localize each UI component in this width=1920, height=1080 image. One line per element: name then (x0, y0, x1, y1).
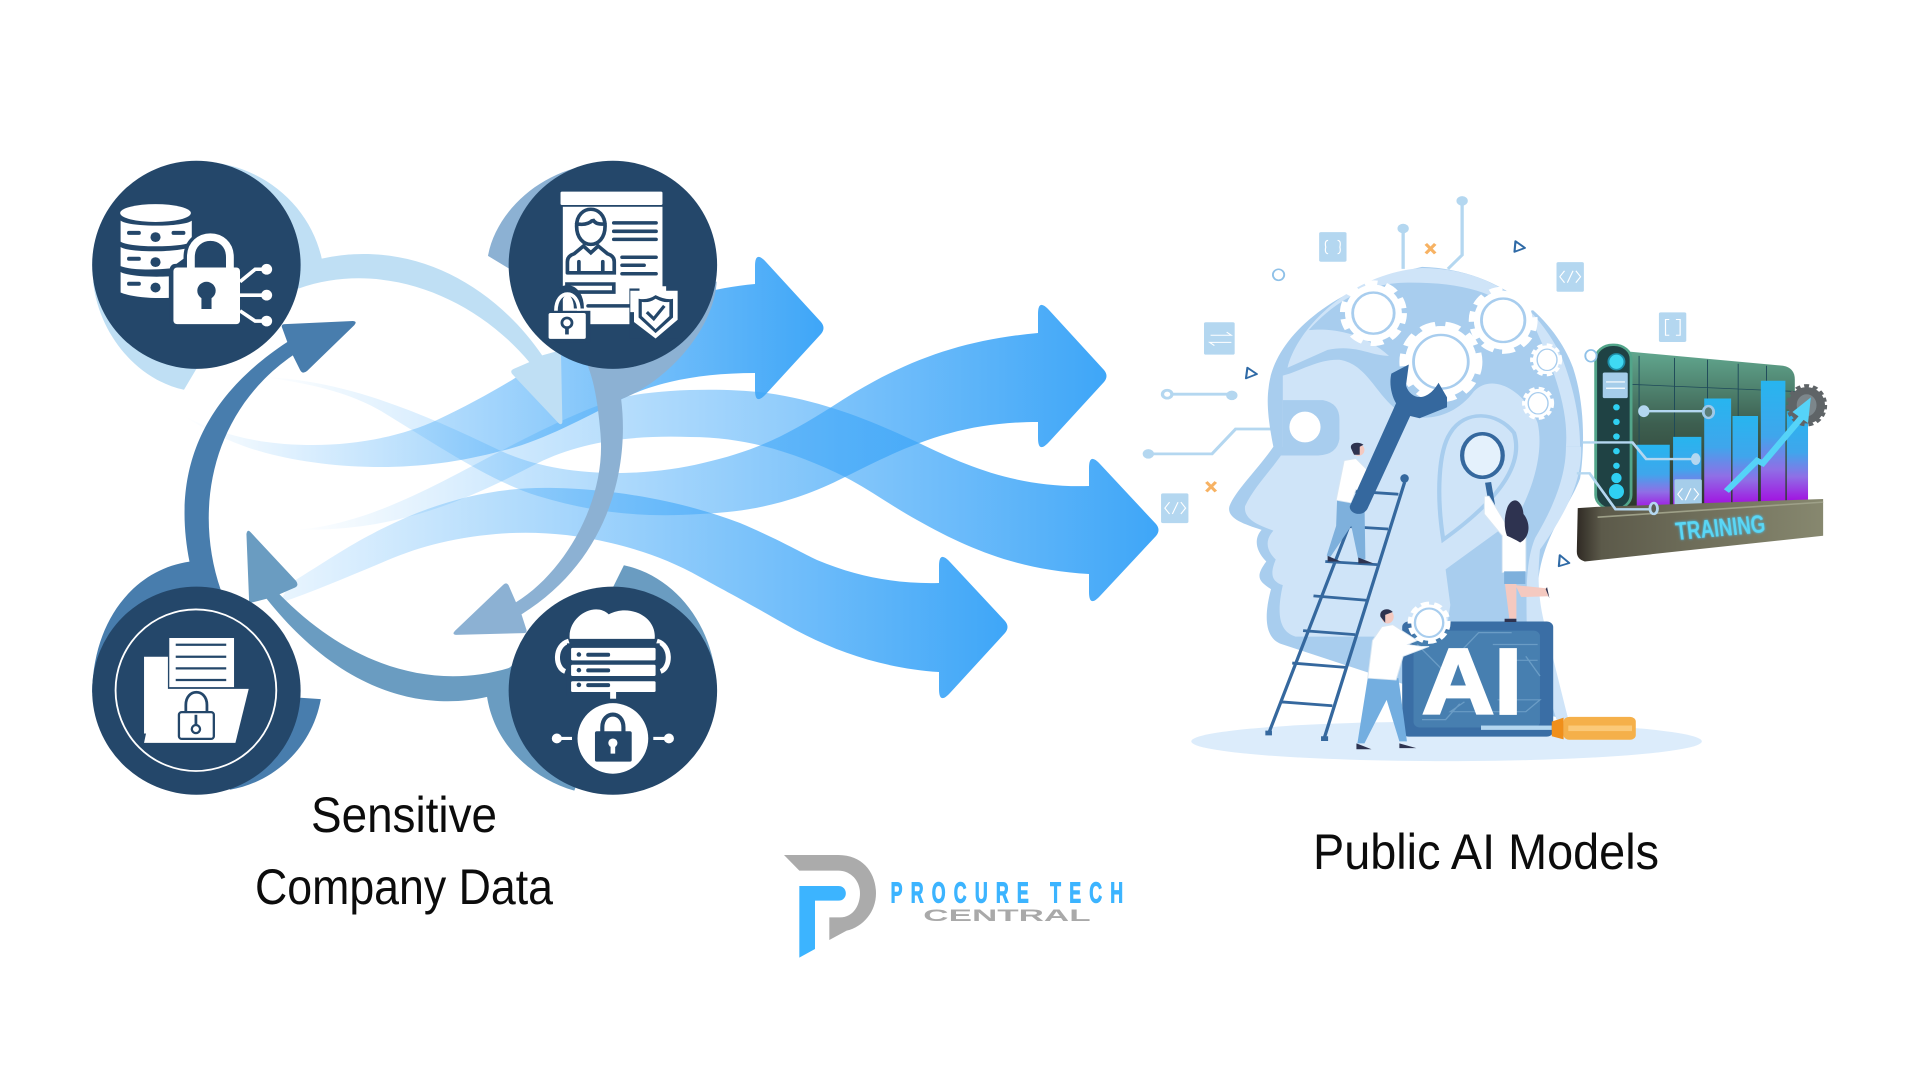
circle: secure folder (92, 587, 301, 795)
held gear (1411, 605, 1447, 641)
logo: Procure Tech Central (784, 855, 1123, 958)
icon: folder with document and lock (144, 638, 249, 743)
left control strip (1596, 345, 1631, 509)
circuit connectors (1143, 196, 1468, 459)
man on ladder (1327, 443, 1375, 563)
logo text: PROCURE TECH (891, 877, 1123, 910)
grid (1630, 356, 1795, 510)
label: Public AI Models: Public AI Models (1313, 824, 1659, 880)
arrow: bottom wave (280, 488, 1008, 698)
wrench (1350, 365, 1447, 514)
markers (1206, 241, 1652, 566)
man with gear (1356, 605, 1447, 749)
icon: small padlock (544, 290, 590, 342)
AI head illustration (1143, 196, 1825, 761)
logo text (891, 877, 1123, 925)
data cycle arrows and circles (92, 161, 717, 795)
logo text: CENTRAL (923, 906, 1091, 925)
tile on chart (1674, 479, 1702, 509)
arrow: top wave (184, 257, 824, 467)
icon: padlock disc (552, 703, 674, 774)
head inner face (1245, 360, 1540, 637)
arrow: identity to cloud (454, 165, 717, 635)
base top edge (1598, 502, 1823, 517)
ladder (1269, 482, 1405, 739)
head back rim (1526, 447, 1581, 720)
label: Sensitive Company Data: Sensitive (311, 787, 497, 843)
icon: database (120, 204, 192, 298)
gear on chart (1789, 386, 1825, 424)
icon: shield with check (629, 286, 678, 338)
AI chip block: AI (1422, 629, 1522, 734)
arrow: folder to database (92, 321, 356, 790)
arrow head on chart (1792, 397, 1811, 423)
arrow: second wave (262, 305, 1106, 515)
icon: padlock with connectors (170, 237, 272, 328)
ground shadow (1191, 722, 1702, 761)
ear detail (1276, 400, 1339, 455)
arrow: database to identity (93, 161, 562, 424)
growth arrow (1726, 417, 1802, 491)
gear three (1474, 291, 1532, 350)
arrow: third wave (294, 390, 1158, 601)
icon: personnel record (561, 192, 662, 324)
gear two (1405, 326, 1477, 397)
ladder feet (1265, 474, 1409, 741)
gear four (1533, 346, 1559, 374)
tile code mark (1678, 488, 1699, 500)
chart backdrop (1611, 350, 1795, 514)
circle: cloud server (509, 587, 717, 795)
arrow: cloud to folder (246, 531, 717, 791)
training text: TRAINING (1674, 509, 1767, 546)
label: Sensitive Company Data (255, 787, 553, 915)
woman with magnifier (1462, 434, 1549, 622)
code tiles (1161, 232, 1686, 523)
icon: white ring (116, 609, 276, 771)
gear five (1525, 389, 1551, 418)
eye (1289, 412, 1321, 442)
gear one (1345, 285, 1402, 342)
label: Sensitive Company Data: Company Data (255, 859, 553, 915)
screwdriver (1481, 717, 1636, 740)
wave arrows to AI models (184, 257, 1158, 698)
icon: cloud and server (557, 609, 668, 699)
connector lines (1577, 350, 1714, 514)
ear outline (1439, 416, 1516, 540)
bars (1637, 381, 1808, 510)
AI chip block (1402, 622, 1553, 737)
gears (1345, 285, 1559, 418)
circle: database lock (92, 161, 301, 369)
logo mark (784, 855, 876, 958)
head silhouette (1229, 267, 1583, 720)
circle: identity document (509, 161, 717, 369)
head top rim (1288, 268, 1580, 447)
training chart panel (1577, 345, 1825, 561)
platform base (1577, 499, 1823, 561)
